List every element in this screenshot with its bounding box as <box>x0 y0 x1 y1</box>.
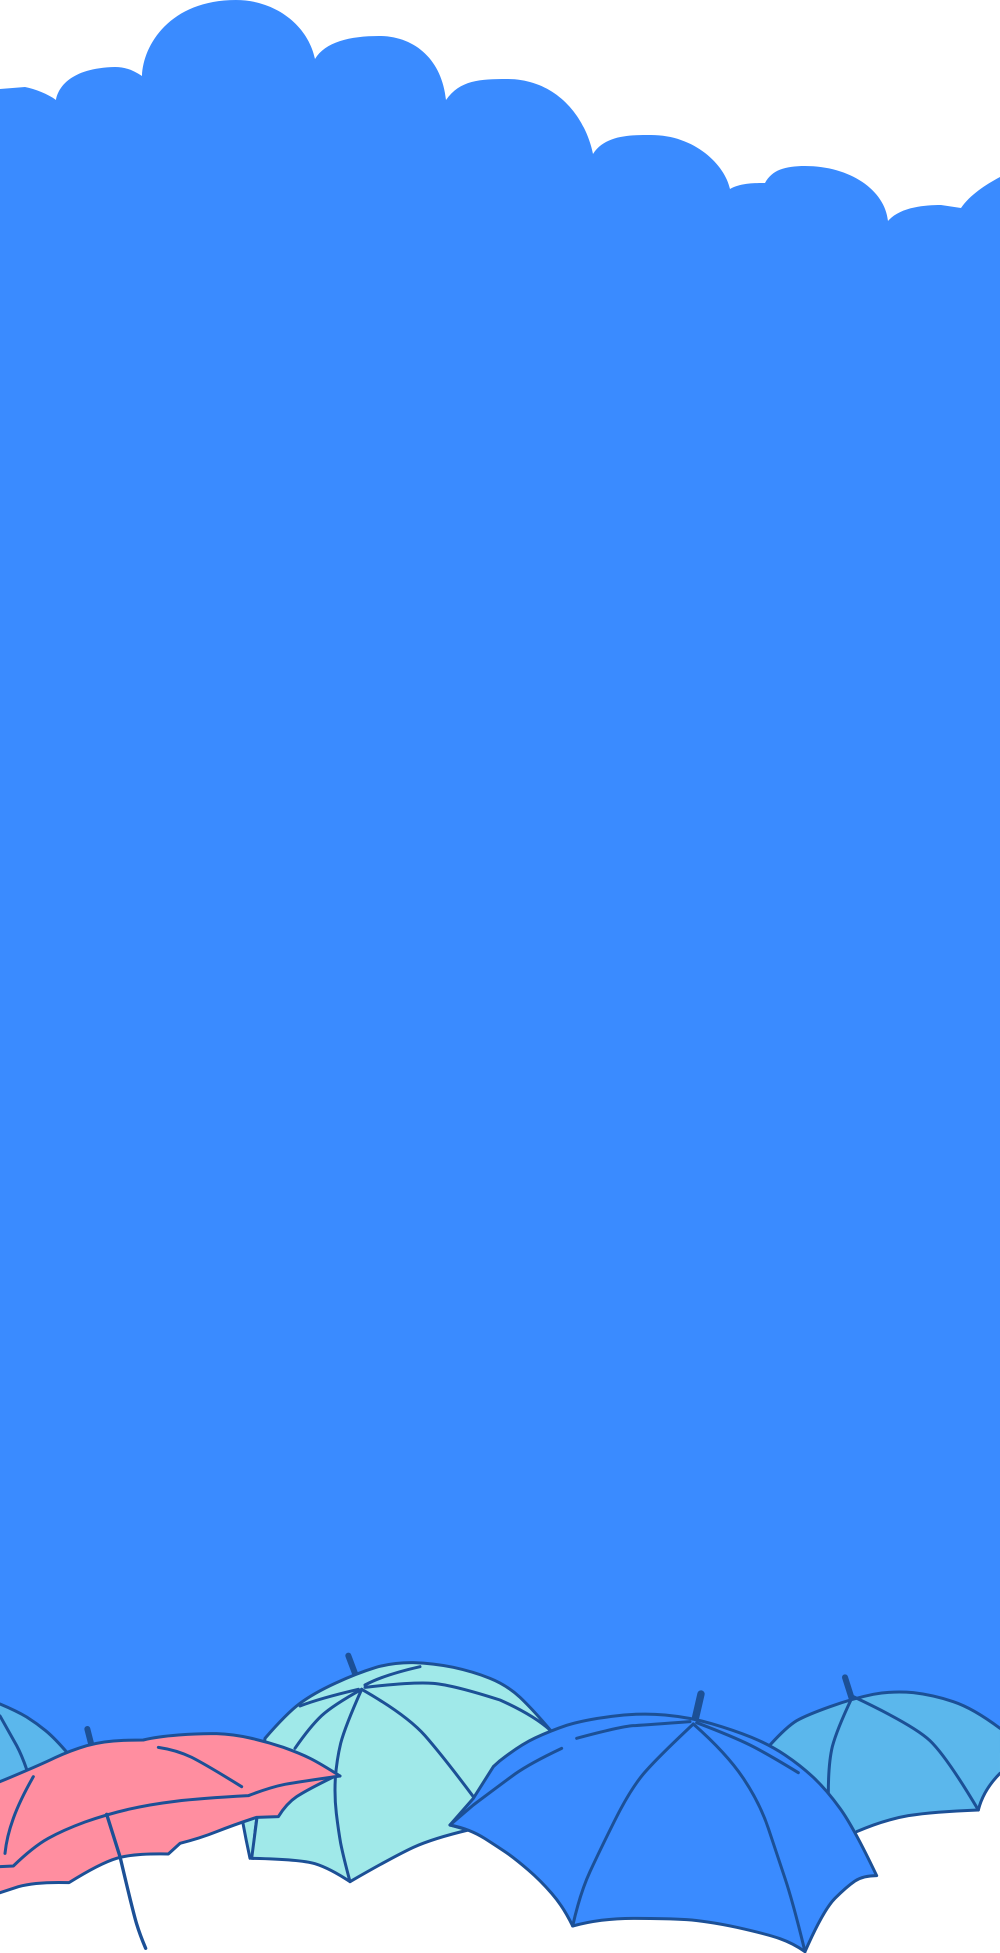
big blue ribs <box>573 1724 693 1926</box>
umbrella: light blue left <box>0 1704 70 1797</box>
umbrella: big blue <box>450 1694 877 1952</box>
pink canopy fill <box>0 1734 340 1893</box>
sky blue handle tip <box>845 1677 852 1698</box>
umbrella: sky blue right <box>770 1677 1000 1832</box>
teal handle tip <box>348 1656 360 1687</box>
pink handle shaft <box>107 1814 146 1948</box>
sky blue ribs <box>828 1698 852 1793</box>
umbrellas group <box>0 1656 1000 1952</box>
sky blue canopy fill <box>770 1692 1000 1832</box>
big blue handle tip <box>695 1694 701 1720</box>
umbrella: teal <box>243 1656 552 1882</box>
pink ribs <box>158 1747 242 1787</box>
umbrella: pink <box>0 1729 340 1948</box>
pink canopy outline <box>0 1734 340 1893</box>
sky blue canopy outline <box>770 1692 1000 1832</box>
pink handle tip <box>87 1729 91 1743</box>
teal back wing <box>243 1818 257 1858</box>
pink fold lines <box>0 1776 340 1867</box>
teal ribs <box>335 1689 362 1882</box>
teal canopy <box>252 1663 552 1882</box>
big blue canopy <box>450 1714 877 1952</box>
